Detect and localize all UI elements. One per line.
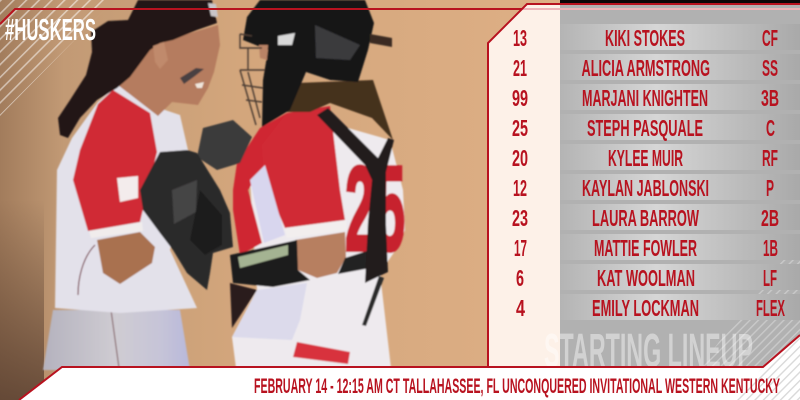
player names: KAT WOOLMAN: [597, 265, 695, 291]
row band 3: [560, 84, 800, 110]
lower shin shadow: [230, 283, 257, 328]
pitcher pant seam: [111, 310, 119, 368]
panel stripes: [700, 235, 800, 367]
catcher mask cage: [240, 34, 265, 125]
row band 8: [560, 234, 800, 260]
positions: 3B: [761, 85, 779, 111]
jersey numbers: 6: [516, 265, 524, 291]
player names: STEPH PASQUALE: [587, 115, 703, 141]
catcher sleeve cuff: [286, 220, 340, 228]
catcher helmet shell: [243, 0, 374, 127]
positions: RF: [762, 145, 778, 171]
lineup panel: [488, 0, 800, 367]
footer corner stripes: [735, 335, 800, 400]
player names: LAURA BARROW: [592, 205, 699, 231]
catcher hip shadow: [232, 283, 307, 340]
panel cream column: [488, 4, 560, 367]
jersey numbers: 20: [512, 145, 528, 171]
pitcher neck and face: [118, 25, 220, 116]
helmet side panel: [315, 25, 360, 60]
second glove: [197, 120, 252, 170]
catcher arm: [295, 232, 346, 278]
hashtag: #HUSKERS: [5, 12, 96, 47]
positions: LF: [763, 265, 777, 291]
player names: [582, 25, 710, 321]
jersey numbers: 21: [513, 55, 527, 81]
catcher body and pants: [232, 122, 405, 368]
positions: CF: [762, 25, 778, 51]
player names: KIKI STOKES: [605, 25, 685, 51]
top-left diagonal stripes: [0, 0, 114, 116]
pitcher sleeve cuff: [89, 222, 143, 238]
catcher face sliver: [259, 45, 268, 60]
catcher hair: [287, 80, 393, 140]
catcher red hood edge: [232, 112, 288, 254]
positions: 1B: [763, 235, 778, 261]
infographic: starting lineup graphic: 25: [345, 142, 405, 276]
top red rule: [0, 9, 530, 24]
jersey numbers: 25: [512, 115, 528, 141]
positions: [756, 25, 785, 321]
pitcher pants: [43, 310, 190, 370]
jersey numbers: 23: [512, 205, 528, 231]
pitcher eye black: [180, 68, 204, 84]
positions: C: [766, 115, 775, 141]
jersey numbers: 17: [514, 235, 527, 261]
catcher underarm panel: [250, 165, 285, 243]
glove lacing: [190, 190, 222, 255]
positions: P: [766, 175, 774, 201]
panel grey column: [560, 4, 800, 367]
row band 2: [560, 54, 800, 80]
row band 7: [560, 204, 800, 230]
positions: SS: [762, 55, 778, 81]
pitcher glove: [140, 150, 233, 290]
pitcher jersey piping: [78, 245, 95, 295]
pitcher jersey: [55, 85, 197, 313]
helmet knob: [370, 34, 392, 47]
row band 9: [560, 264, 800, 290]
jersey numbers: 13: [513, 25, 527, 51]
row band 4: [560, 114, 800, 140]
player names: EMILY LOCKMAN: [592, 295, 699, 321]
jersey logo N: [117, 176, 138, 202]
pitcher ear: [153, 42, 168, 69]
jersey numbers: 12: [513, 175, 527, 201]
forearm tape: [238, 245, 288, 268]
glove highlight: [172, 180, 197, 224]
player names: KYLEE MUIR: [608, 145, 683, 171]
row band 10: [560, 294, 800, 320]
catcher forearm guard: [230, 240, 310, 287]
dangling strap: [362, 276, 384, 326]
row band 5: [560, 144, 800, 170]
footer white strip: [19, 335, 800, 400]
lineup text: [512, 25, 785, 321]
helmet logo: [278, 33, 295, 45]
pink rule: [522, 8, 800, 10]
jersey numbers: 4: [516, 295, 525, 321]
pitcher smile: [195, 82, 204, 88]
jersey numbers: [512, 25, 528, 321]
player names: MATTIE FOWLER: [594, 235, 697, 261]
jersey numbers: 99: [512, 85, 528, 111]
pitcher ponytail and hair: [58, 0, 217, 138]
black top band: [560, 0, 800, 3]
catcher red sleeve: [262, 106, 345, 228]
jersey red patch: [293, 342, 350, 364]
row band 1: [560, 24, 800, 50]
waist band: [338, 250, 370, 274]
bottom-left shadow on dirt: [0, 200, 44, 400]
chest protector straps: [317, 108, 394, 283]
row band 6: [560, 174, 800, 200]
pitcher headband highlight: [208, 3, 218, 17]
photo: two softball players: [43, 0, 405, 370]
positions: 2B: [761, 205, 779, 231]
pitcher arm: [97, 232, 155, 284]
pitcher red sleeve: [73, 90, 157, 231]
